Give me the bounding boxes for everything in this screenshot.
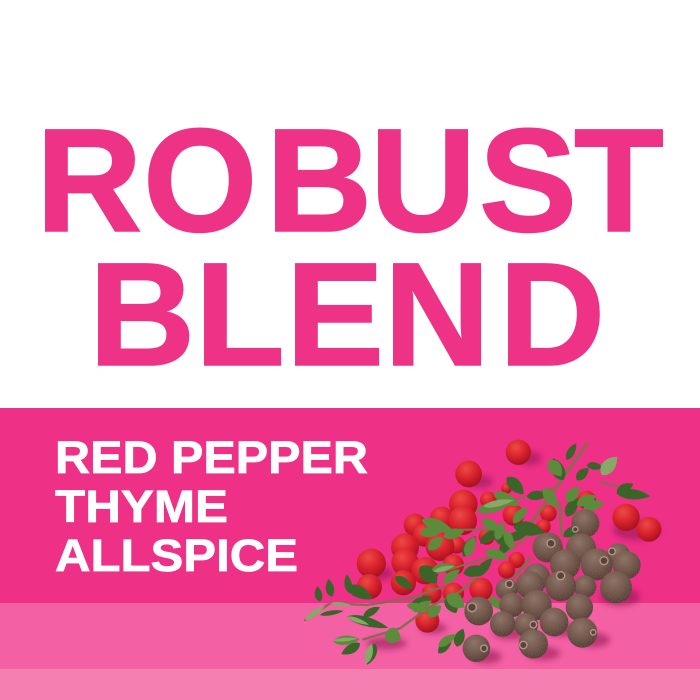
pale leaves	[303, 452, 622, 664]
dark leaves	[313, 441, 651, 666]
allspice berries	[463, 509, 641, 662]
mid leaves	[333, 456, 605, 650]
ingredient: allspice: ALLSPICE	[55, 530, 298, 581]
ingredient: thyme: THYME	[55, 481, 228, 532]
ingredient list	[55, 432, 368, 581]
red peppercorns	[357, 440, 661, 633]
middle stripe	[0, 603, 700, 669]
title: ROBUST BLEND	[36, 99, 664, 397]
pink band	[0, 408, 700, 603]
ingredient: red pepper: RED PEPPER	[55, 432, 368, 483]
light stripe	[0, 669, 700, 700]
title line 1: ROBUST	[36, 99, 664, 263]
soft shadows	[367, 452, 660, 663]
allspice calyx rings	[468, 527, 615, 652]
title line 2: BLEND	[89, 233, 605, 397]
white background	[0, 0, 700, 408]
thyme leaves	[303, 441, 651, 666]
illustration: pile of spices	[303, 440, 661, 666]
thyme stems	[305, 444, 647, 639]
